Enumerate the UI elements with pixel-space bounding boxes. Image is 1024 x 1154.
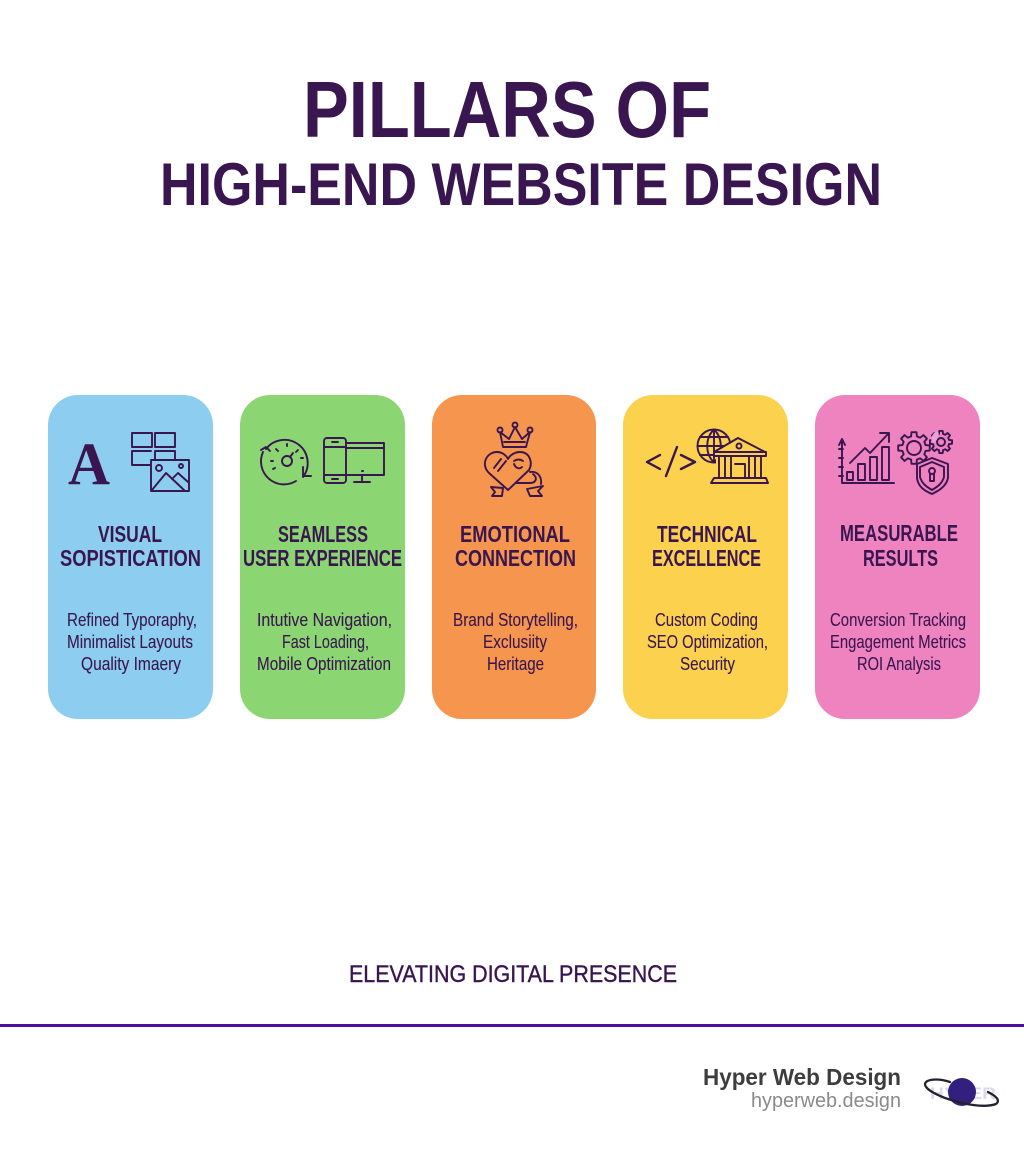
footer rule xyxy=(0,1024,1024,1027)
panel: technical excellence xyxy=(623,395,788,719)
heading: seamless user experience: USER EXPERIENCE xyxy=(243,545,402,571)
heading: visual sophistication: SOPISTICATION xyxy=(60,545,201,571)
text: seamless details: Fast Loading, xyxy=(282,632,369,652)
text: measurable details xyxy=(830,610,966,674)
text: visual sophistication details: Refined Typoraphy, xyxy=(67,610,197,630)
text: seamless details: Mobile Optimization xyxy=(257,654,391,674)
text: emotional details xyxy=(453,610,578,674)
text: measurable details: Engagement Metrics xyxy=(830,632,966,652)
icon: typography and layout xyxy=(68,431,189,497)
heading: measurable results xyxy=(840,520,958,571)
icon: speed and devices xyxy=(261,438,384,484)
icon: crown and heart xyxy=(485,422,543,496)
text: emotional details: Brand Storytelling, xyxy=(453,610,578,630)
logo xyxy=(925,1078,998,1106)
icon: typography and layout: A xyxy=(68,431,110,497)
panel: seamless user experience xyxy=(240,395,405,719)
heading: measurable results: RESULTS xyxy=(863,545,938,571)
title xyxy=(160,65,882,218)
panel: visual sophistication xyxy=(48,395,213,719)
text: visual sophistication details xyxy=(67,610,197,674)
heading: technical excellence: EXCELLENCE xyxy=(652,545,761,571)
text: technical details: Custom Coding xyxy=(655,610,758,630)
heading: technical excellence xyxy=(652,521,761,571)
panel: emotional connection xyxy=(432,395,596,719)
title: HIGH-END WEBSITE DESIGN xyxy=(160,151,882,218)
heading: seamless user experience xyxy=(243,521,402,571)
icon: code and globe building xyxy=(647,430,768,483)
heading: measurable results: MEASURABLE xyxy=(840,520,958,546)
heading: technical excellence: TECHNICAL xyxy=(657,521,757,547)
heading: visual sophistication xyxy=(60,521,201,571)
footer brand: Hyper Web Design xyxy=(703,1064,901,1090)
tagline: ELEVATING DIGITAL PRESENCE xyxy=(349,961,677,988)
text: technical details xyxy=(647,610,768,674)
footer brand xyxy=(703,1064,901,1112)
text: measurable details: Conversion Tracking xyxy=(830,610,966,630)
text: visual sophistication details: Quality Imaery xyxy=(81,654,181,674)
icon: chart, gears and shield xyxy=(839,430,952,494)
footer brand: hyperweb.design xyxy=(751,1090,901,1112)
text: seamless details: Intutive Navigation, xyxy=(257,610,392,630)
title: PILLARS OF xyxy=(303,65,711,154)
text: technical details: Security xyxy=(680,654,735,674)
heading: seamless user experience: SEAMLESS xyxy=(278,521,368,547)
heading: emotional connection: CONNECTION xyxy=(455,545,576,571)
logo: HYPER xyxy=(930,1084,996,1103)
heading: emotional connection: EMOTIONAL xyxy=(460,521,570,547)
text: visual sophistication details: Minimalist Layouts xyxy=(67,632,193,652)
text: emotional details: Heritage xyxy=(487,654,544,674)
text: measurable details: ROI Analysis xyxy=(857,654,941,674)
text: emotional details: Exclusiity xyxy=(483,632,547,652)
text: seamless details xyxy=(257,610,392,674)
panel: measurable results xyxy=(815,395,980,719)
heading: visual sophistication: VISUAL xyxy=(98,521,162,547)
heading: emotional connection xyxy=(455,521,576,571)
text: technical details: SEO Optimization, xyxy=(647,632,768,652)
